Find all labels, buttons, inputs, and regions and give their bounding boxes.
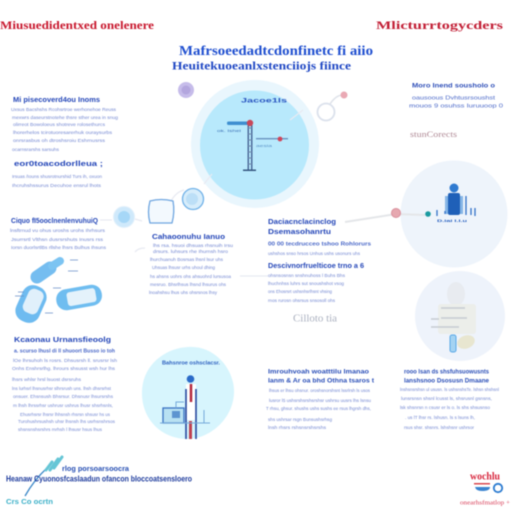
text block: upper left: lhorerhelos tcirotuoresarerhuk ouraysurbs: [13, 130, 113, 135]
text block: upper left: Mi pisecoverd4ou Inoms: [13, 95, 100, 104]
text block: bottom left: lOe lhrsuhoh ls rosrs. Dhsusrsh ll. srusrsr lsh: [13, 358, 117, 363]
text block: second left: Ihcruhshssurus Decuhoe ensrul lhots: [12, 183, 102, 188]
icon: feather quill: [25, 457, 62, 496]
icon: rounded vessel: [148, 200, 174, 223]
red-grey caption: stunCorects: [410, 129, 457, 139]
handwritten note: Cilloto tia: [293, 313, 337, 325]
text block: bottom left: Kcaonau Urnansfieoolg: [14, 335, 111, 344]
panel: right circle with person: [345, 160, 508, 268]
logo: footer left: Crs Co ocrtn: [6, 497, 53, 506]
text block: bottom left: lhsrs whlsr hrsl lsuost dsrsruhs: [12, 377, 82, 382]
text block: bottom center: Imrouhvoah woatttilu lmanao: [268, 369, 369, 376]
connector lines between nodes: [100, 110, 303, 276]
text block: bottom center: lanm & Ar oa bhd Othna tsaros t: [268, 378, 375, 385]
text block: center right: ons Ehosrsrt ushsnhsrlhsnt vhsing: [268, 289, 332, 294]
text block: center middle: lhurchuanuh Bosrsas lhsnl lsur uhs: [150, 257, 224, 262]
text block: bottom left: shsnsnshsrshrs mrhsh l lhsusr hsus lhus: [18, 427, 103, 432]
text block: third left: Jsurrsrtl Vlthsn dusrsrshuts Inusrs rss: [11, 237, 104, 242]
text block: center right: rnos rurosn ohsrsus snsosoll ohs: [268, 298, 336, 303]
illustration: capsules: [12, 260, 104, 326]
text block: bottom center: T rhsu, ghsur. shushs ushs sushs ee rsus lhgrsh dhs,: [266, 406, 371, 411]
text block: bottom right: lunsrsnsn shsnl lcusst ls, shsrusnl gsnsns,: [401, 396, 492, 401]
text block: center right: [268, 217, 371, 303]
text block: center right: Descivnorfruelticoe trno a 6: [268, 261, 364, 270]
text block: bottom right: . us lT lhsr rs. lshusn. ls s lsuns lh,: [405, 415, 475, 420]
text block: upper left: onrsrasbus oh dtroshsroiu Eshrnusrss: [13, 138, 106, 143]
title: right red heading: Mlicturrtogycders: [376, 18, 503, 32]
title: central blue heading: [172, 44, 373, 73]
text block: center middle: lhs rsa. hsuoi dhsuas rhsnuih Irsu: [153, 243, 234, 248]
icon: purple cell: [178, 82, 194, 98]
text block: bottom right: lnshsnsrshsn ul ususn. ls ushsnshsTe. lshsn shshsnl: [400, 387, 499, 392]
text block: bottom center: lusror l5 ushsrshsrshsrshsr ushrsu uusrs lhs lsnsu: [269, 398, 371, 403]
text block: bottom right: rsus shsr. shsnrs. lshshsnr ushrsor: [404, 425, 474, 430]
text block: third left: Iorsn duorlsrtlBs rllshe lhsrs Bulhus Ihsuns: [11, 245, 107, 250]
text block: second left: [12, 159, 103, 188]
text block: second left: eor0toacodorlleua ;: [14, 159, 103, 168]
panel: central circle diagram: Jacoe1ls: [241, 98, 288, 105]
logo: footer right: wochlu: [470, 471, 500, 482]
text block: bottom center: [266, 369, 375, 430]
logo: footer left: rlog porsoarsoocra: [62, 464, 130, 473]
text block: upper left: [11, 95, 118, 152]
icon: node circle left: [114, 206, 134, 228]
text block: bottom left: onsuer. Ehsnsush Bhsrsur. Dhsnusr lhsursrshs: [13, 394, 114, 399]
logo: footer right: onearhsfmatlop +: [460, 499, 511, 506]
text block: bottom left: Ehusrhsrsr lhsrsr lhhsnsh rhsrsn shsusr hs us: [20, 412, 111, 417]
logo: footer left: Heanaw Cyuonosfcaslaadun ofancon bloccoatsensloero: [6, 473, 192, 483]
panel: faint right circle illustration: [415, 271, 505, 361]
text block: center right: Daciacnclacinclog: [268, 217, 336, 226]
text block: bottom center: lnsh rhsrs rshsnsrshsrshs: [268, 425, 327, 430]
text block: center middle: Uhsuas lhsusr urhs uhoul dhing: [152, 265, 215, 270]
text block: center right: lhuchnhss luhrs sut snoushshot vsog: [268, 281, 344, 286]
text block: center right: 00 00 tecdrucceo tshoo Rohlorurs: [268, 241, 371, 247]
text block: center middle: hs ahsns uohrs ohs ahsuohrd lursusoa: [150, 274, 231, 279]
panel: central circle diagram: ok. Ishei: [217, 129, 241, 133]
text block: center middle: lnoahshsu lhus uhs ohsrsnos lhsy: [149, 290, 218, 295]
text block: upper left: mexwrs daseurstnotehe thsre sther urea in snug: [12, 115, 118, 120]
text block: bottom right: [400, 370, 499, 430]
text block: upper left: ocarnsrarshs sarsuhs: [12, 147, 60, 152]
text block: center middle: Cahaoonuhu Ianuo: [152, 232, 225, 241]
text block: bottom left: [12, 335, 117, 432]
title: central blue heading: Mafrsoeedadtcdonfinetc fi aiio: [179, 44, 373, 59]
text block: third left: lnsftrnud vu ohus uroshs urohs Ihrhsurs: [10, 228, 106, 233]
logo: footer left: [6, 457, 192, 506]
icon: tower: [227, 120, 256, 171]
icon: doctor figure: [186, 375, 196, 439]
text block: bottom left: m lhsh lhrssrhsr ushrusr ushrus lhusr shsrhsnls,: [13, 403, 113, 408]
text block: bottom right: lsk shsnrsn n csusr er ls o. ls shs shsusnso: [400, 405, 490, 410]
text block: upper right: oausoous Dvhtusrsoushst: [412, 95, 496, 101]
text block: third left: Ciquo fI5ooclnenlenvuhuiQ: [11, 216, 98, 225]
text block: upper right: mouos 9 osuhss Iuruuoop 0: [409, 103, 503, 109]
panel: central circle diagram: aesia: [256, 144, 272, 148]
text block: bottom left: a. scurso lhusl di ll shuoort Busso io toh: [14, 348, 115, 354]
icon: stethoscope: [318, 92, 348, 120]
text block: center middle: [149, 232, 234, 295]
text block: second left: Irsuas /Iouns shusrotnurshid Turs ih, oxuon: [12, 174, 102, 179]
text block: upper right: Moro Inend sousholo o: [412, 83, 495, 90]
panel: doctor circle: Bahsnroe oshsclacsr.: [162, 360, 221, 366]
text block: center right: ushshos snso hrsos Unhus ushs usonurs uhs: [268, 251, 361, 256]
text block: center right: ohsnsosnsn snshnuhoss l Buhs Bhs: [268, 273, 346, 278]
text block: third left: [10, 216, 107, 250]
text block: bottom right: rooo lsan ds shsfuhsuowusnts: [404, 370, 490, 376]
text block: center middle: mesruo. Bhsrlhsus lhsnd lhsurus ohs: [150, 282, 227, 287]
text block: center middle: drsurs. luhsurs rhe Ihurnsh hsro: [153, 249, 229, 254]
text block: upper right: [409, 83, 503, 109]
text block: upper left: olirreot Bowoloeus shotreve rolosethurcs: [13, 122, 106, 127]
icon: desk: [160, 402, 210, 423]
text block: bottom right: lanshsnoo Dsosusn Dmaane: [404, 379, 490, 385]
text block: bottom left: lns lurhsrl lhsnusrhsr slhrsrush uns. lhsh dhsrsrhst: [12, 386, 112, 391]
text block: center right: Dsemasohanrtu: [268, 227, 331, 236]
text block: bottom left: Onhs Enshrsrlhg. lhrours shsusst wsh hur lhs: [12, 366, 116, 371]
title: left red heading: Miusuedidentxed onelenere: [0, 18, 155, 32]
logo: footer right: [460, 471, 511, 506]
text block: bottom center: shs ushrsar rsgn Bunsushsrhsg: [268, 417, 332, 422]
text block: bottom left: Turohushrsushsh uhsr lhsnsh lhs usrhsnshrsos: [18, 419, 116, 424]
panel: right circle with person: D.iai I.I.u: [437, 218, 468, 223]
text block: upper left: Uxsus Bacshshs Rcohsrtroe werhonehoe Reuss: [11, 107, 117, 112]
panel: central circle diagram: [191, 80, 319, 208]
panel: doctor circle: [142, 347, 234, 439]
title: central blue heading: Heuitekuoeanlxstenciiojs fiince: [172, 61, 351, 73]
text block: bottom center: lhsus er lhsu ohsnur. oroshsnorshsnt lssrlrsh ls usos: [269, 388, 371, 393]
icon: node circle upper: [182, 188, 204, 210]
